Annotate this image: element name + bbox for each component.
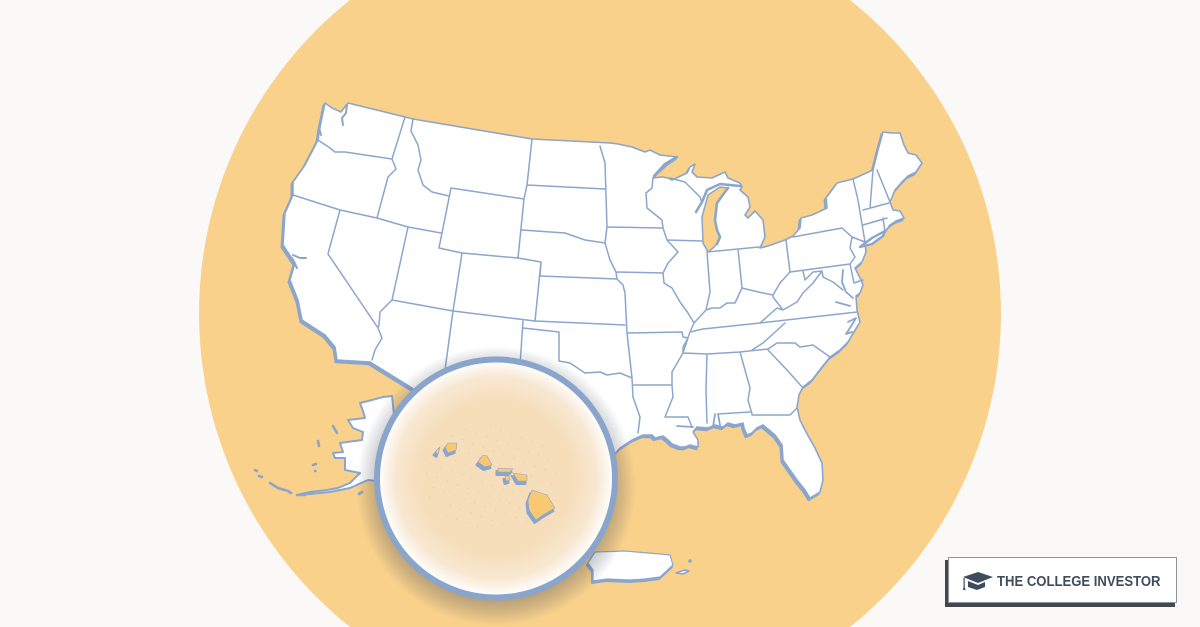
Aleutian islands bbox=[255, 426, 362, 495]
state borders bbox=[293, 117, 890, 433]
icon: graduation cap bbox=[963, 572, 993, 590]
badge panel bbox=[948, 558, 1176, 602]
magnifier lens shadow bbox=[356, 346, 636, 626]
badge shadow bbox=[945, 560, 1175, 607]
land outline bbox=[283, 103, 922, 498]
coast shadow bbox=[282, 105, 920, 500]
logo badge bbox=[945, 558, 1176, 607]
Vieques bbox=[676, 570, 689, 574]
Culebra bbox=[688, 559, 692, 563]
Puerto Rico bbox=[587, 551, 692, 583]
dotted sea area bbox=[424, 425, 560, 531]
background circle bbox=[199, 0, 1001, 627]
Lake Michigan heavy shoreline, Green Bay and Lake Superior edge bbox=[654, 157, 740, 244]
Lake Michigan bbox=[702, 187, 728, 252]
island shadows bbox=[434, 446, 554, 523]
Long Island bbox=[860, 231, 885, 247]
lens disc bbox=[377, 360, 615, 598]
Chesapeake and Outer Banks details bbox=[677, 270, 856, 427]
Alaska bbox=[255, 396, 400, 495]
brand name: THE COLLEGE INVESTOR bbox=[997, 574, 1161, 590]
Hawaiian islands bbox=[434, 443, 555, 523]
Puget Sound and San Francisco Bay bbox=[292, 105, 347, 268]
magnifier lens: Hawaii bbox=[377, 360, 615, 598]
island tops bbox=[435, 443, 555, 520]
map: contiguous United States bbox=[282, 103, 922, 500]
